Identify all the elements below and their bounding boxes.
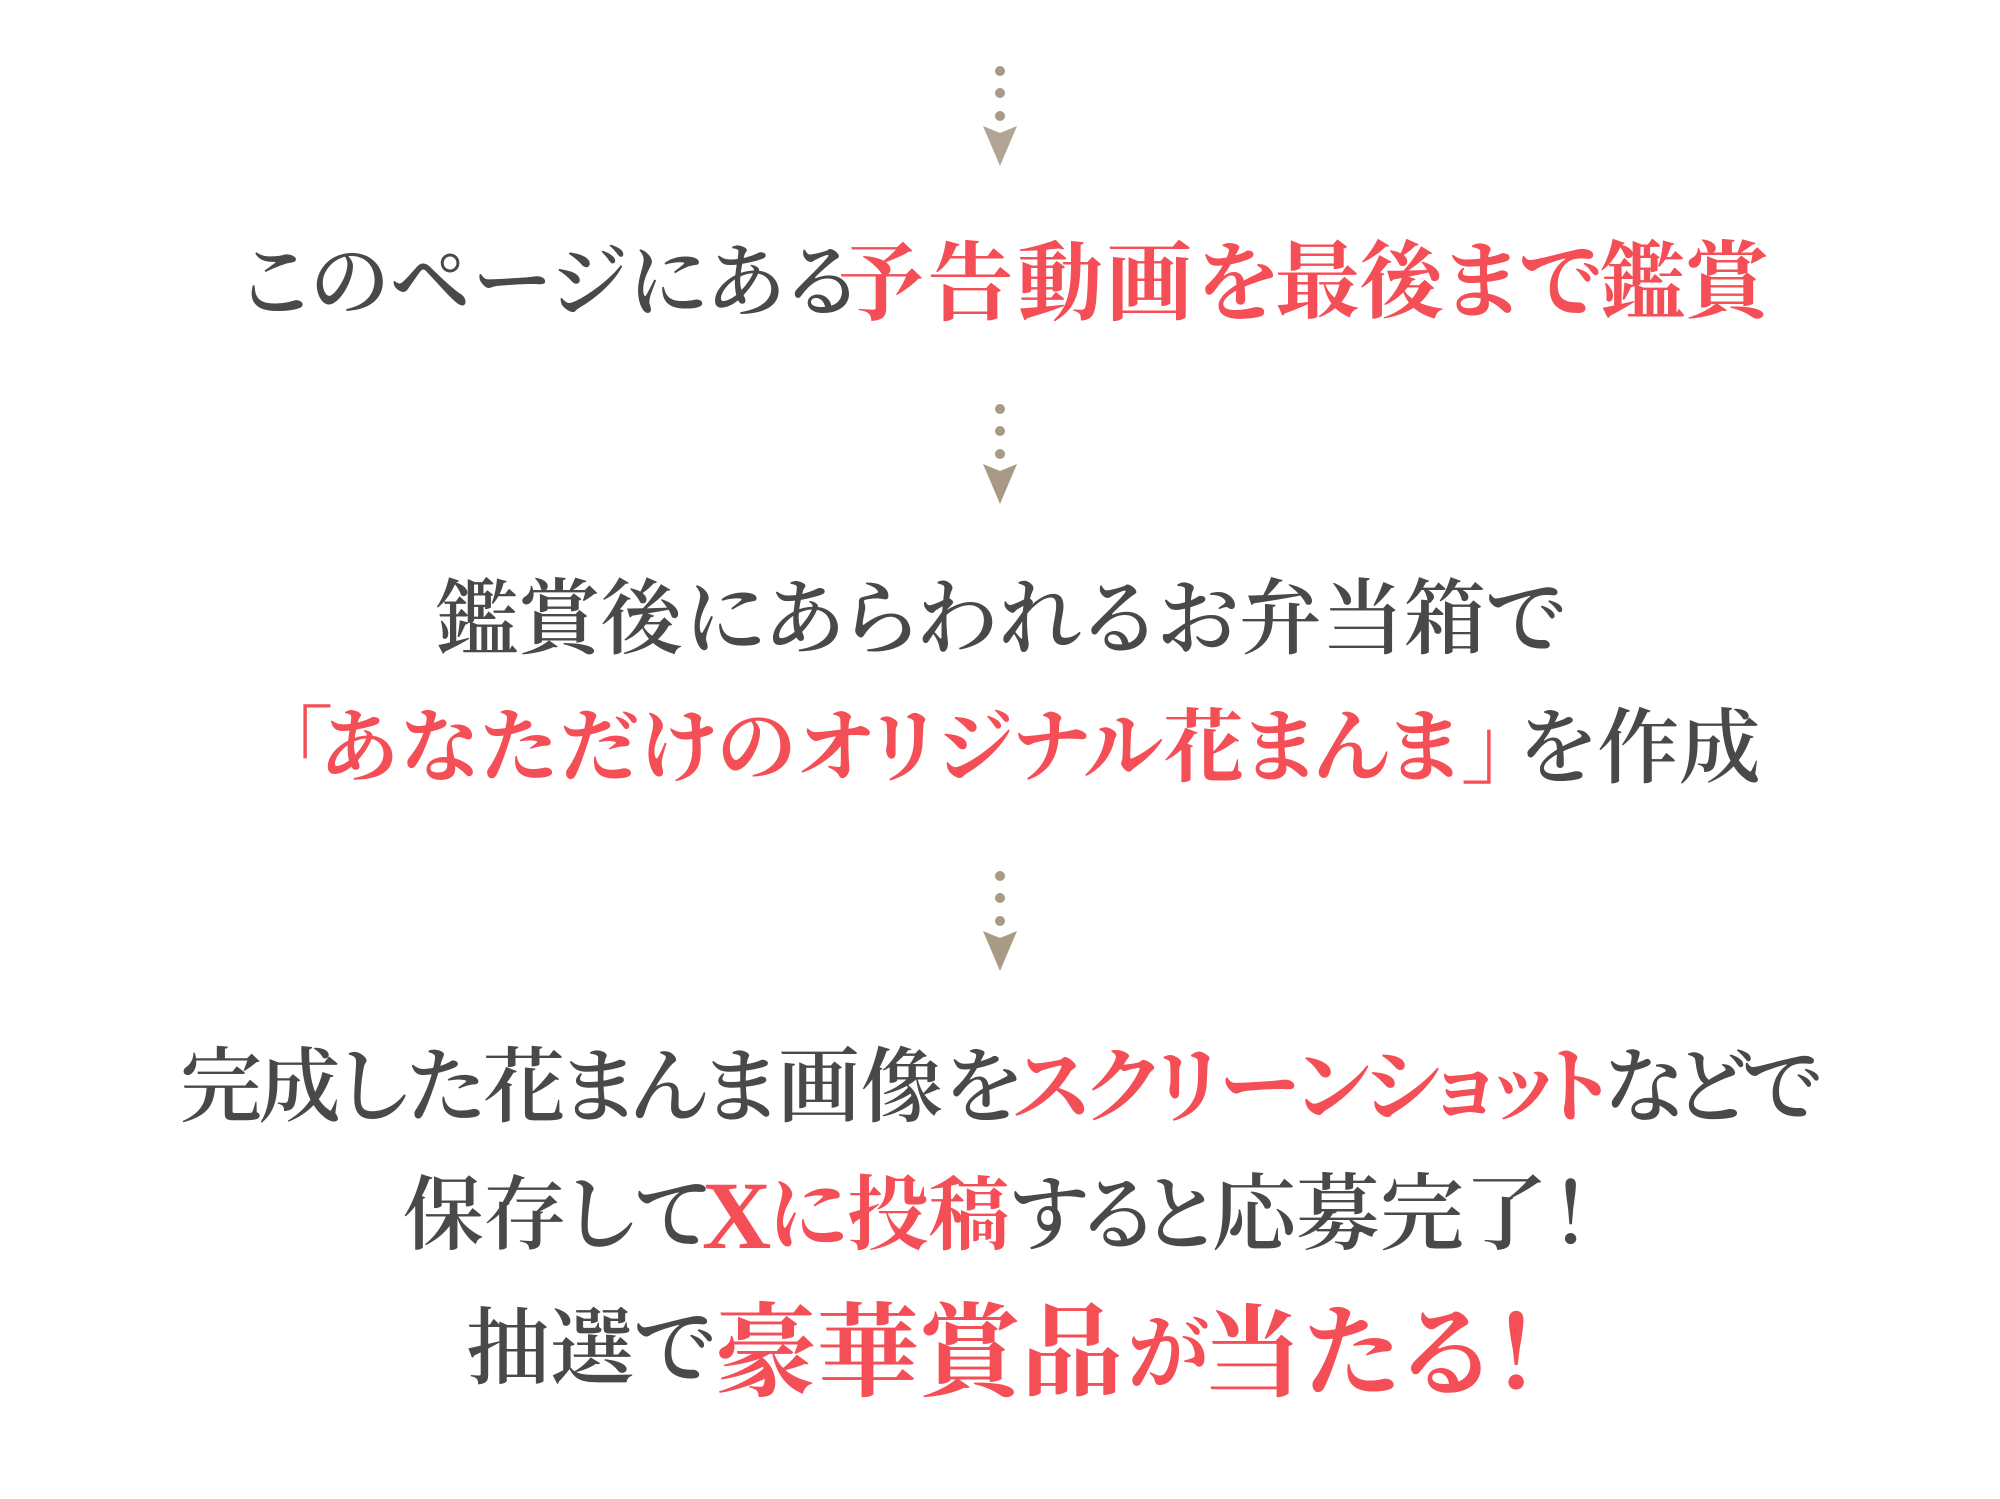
step 3 text line 2 bbox=[403, 1162, 1593, 1269]
arrow 2 bbox=[983, 404, 1017, 504]
step 2 text line 2: を作成 bbox=[1518, 703, 1761, 794]
arrow 1 bbox=[983, 66, 1017, 166]
step 3 text line 1: スクリーンショット bbox=[1012, 1042, 1606, 1133]
step 3 text line 2: X bbox=[702, 1162, 771, 1269]
step 3 text line 3 bbox=[466, 1298, 1543, 1411]
step 3 text line 2: に投稿 bbox=[766, 1171, 1010, 1261]
step 2 text line 2: 」 bbox=[1461, 702, 1503, 795]
step 3 text line 3: 豪華賞品 bbox=[715, 1298, 1123, 1411]
step 3 text line 3: 当たる！ bbox=[1202, 1299, 1543, 1410]
step 3 text line 3: が bbox=[1125, 1309, 1208, 1400]
step 1 text: 最後まで鑑賞 bbox=[1275, 237, 1769, 330]
step 3 text line 1: などで bbox=[1602, 1042, 1814, 1133]
step 1 text: 予告動画を bbox=[838, 236, 1283, 332]
arrow 3 bbox=[983, 871, 1017, 971]
step 3 text line 1: 完成した花まんま bbox=[180, 1042, 774, 1133]
step 1 text: このページにある bbox=[240, 239, 857, 328]
step 2 text line 1: 鑑賞後にあらわれるお弁当箱で bbox=[436, 574, 1565, 665]
step 1 text bbox=[240, 236, 1769, 332]
step 3 text line 1 bbox=[180, 1042, 1819, 1133]
step 2 text line 2: 「 bbox=[291, 702, 333, 795]
step 3 text line 2: 保存して bbox=[403, 1171, 708, 1261]
step 2 text line 2: あなただけのオリジナル花まんま bbox=[321, 705, 1460, 793]
step 3 text line 2: すると bbox=[1010, 1170, 1209, 1261]
step 3 text line 2: 応募完了！ bbox=[1212, 1169, 1593, 1262]
step 3 text line 1: 画像を bbox=[778, 1042, 1024, 1133]
step 3 text line 3: 抽選で bbox=[466, 1303, 715, 1396]
